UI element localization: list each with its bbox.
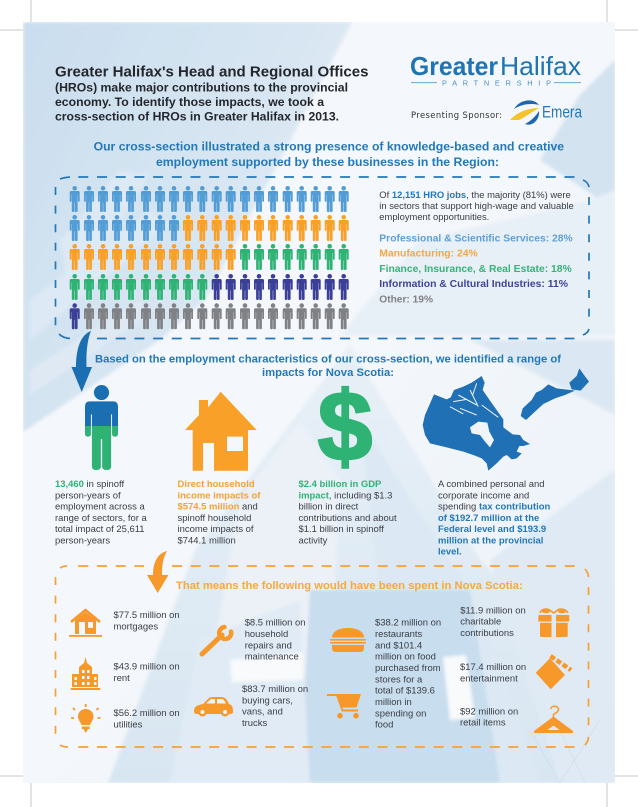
item: retail [460,706,573,733]
icon: car [194,697,233,716]
text: household income: $574.5 million and [178,502,258,512]
item: household repairs: $8.5 million on [245,618,306,629]
text: tax contribution: million at the provincial [438,535,543,546]
item: mortgages [69,610,180,637]
icon: shopping cart [327,694,361,718]
text: HRO jobs intro: employment opportunities. [379,212,489,223]
text: GDP impact: $1.1 billion in spinoff [298,524,384,535]
text: food spending: and $101.4 [375,640,422,651]
legend: sector shares: Information & Cultural Industries: 11% [379,279,568,290]
item: mortgages: mortgages [114,622,158,632]
text: tax contribution [438,479,550,558]
icon: map of Canada [423,376,530,471]
item: utilities: utilities [114,720,143,731]
icon: orange house [185,392,257,471]
heading: cross-section: employment supported by these businesses in the Region: [156,155,499,169]
item: entertainment: entertainment [460,673,518,684]
text: GDP impact: billion in direct [298,502,359,512]
text: food spending: million on food [375,652,436,663]
item: utilities: $56.2 million on [114,708,180,719]
item: rent [71,657,180,690]
legend: sector shares: Manufacturing: 24% [379,249,478,260]
text: spinoff employment: 13,460 in spinoff [55,479,124,490]
text: GDP impact: contributions and about [298,513,397,524]
heading: impacts: impacts for Nova Scotia: [262,367,394,379]
item: utilities [71,704,180,733]
text: tax contribution: level. [438,547,462,558]
text: household income: Direct household [178,479,255,490]
title block: (HROs) make major contributions to the provincial [55,80,348,94]
text: tax contribution: of $192.7 million at the [438,513,539,524]
text: food spending: total of $139.6 [375,686,435,697]
icon: dollar sign: $ [318,371,372,481]
text: GDP impact [298,479,397,546]
title block: economy. To identify those impacts, we took a [55,95,324,109]
presenting sponsor: Emera [411,100,583,125]
text: food spending: purchased from [375,663,441,674]
item: entertainment: $17.4 million on [460,662,526,673]
text: tax contribution: corporate income and [438,490,529,501]
icon: burger [330,628,366,652]
text: spinoff employment: person-years [55,535,110,546]
item: vehicles [194,684,308,729]
text: household income: income impacts of [178,490,261,501]
row 5 [70,303,349,329]
text: spinoff employment: person-years of [55,490,121,501]
icon: light bulb [71,704,100,733]
text: spinoff employment [55,479,148,546]
text: GDP impact: activity [298,535,328,546]
arrow: blue down [72,331,92,392]
heading: impacts [95,354,561,379]
item: charitable contributions [460,605,569,639]
item: entertainment [460,656,571,689]
icon: wrench [202,627,231,654]
presenting sponsor: Emera: Emera [542,104,583,122]
item: mortgages: $77.5 million on [114,610,180,621]
text: GDP impact: $2.4 billion in GDP [298,479,381,490]
icon: Emera swoosh [510,100,539,125]
heading: cross-section: Our cross-section illustrated a strong presence of knowledge-based and creative [94,140,564,154]
text: food spending: spending on [375,708,426,719]
item: household repairs: maintenance [245,652,299,663]
icon: small house [69,610,102,637]
icon: hanger [534,706,573,733]
title block [55,64,368,124]
title block: Greater Halifax's Head and Regional Offices [55,64,368,80]
text: household income: income impacts of [178,524,254,535]
item: rent: $43.9 million on [114,662,180,673]
heading: impacts: Based on the employment characteristics of our cross-section, we identified a range of [95,354,561,366]
Greater Halifax Partnership logo: Halifax [500,51,581,81]
text: food spending: food [375,720,393,731]
item: rent: rent [114,673,130,684]
text: GDP impact: impact, including $1.3 [298,490,392,501]
item: household repairs [202,618,306,663]
item: vehicles: buying cars, [242,695,293,706]
row 4 [70,274,349,300]
heading: spending: That means the following would have been spent in Nova Scotia: [176,580,523,592]
Greater Halifax Partnership logo: Greater [410,51,498,81]
item: vehicles: $83.7 million on [242,684,308,695]
icon: gift box [538,609,569,637]
icon: apartment buildings [71,657,100,690]
heading: cross-section [94,140,564,169]
legend: sector shares [379,234,573,306]
Greater Halifax Partnership logo [410,51,581,88]
text: household income [178,479,261,546]
item: vehicles: vans, and [242,707,283,718]
text: household income: spinoff household [178,513,251,524]
text: food spending: $38.2 million on [375,618,441,629]
text: household income: $744.1 million [178,535,236,546]
legend: sector shares: Professional & Scientific Services: 28% [379,234,573,245]
pictogram: 100 people by sector [70,186,349,329]
arrow: orange down [147,551,168,593]
Greater Halifax Partnership logo: PARTNERSHIP [442,78,551,88]
text: HRO jobs intro: in sectors that support high-wage and valuable [379,201,574,212]
text: HRO jobs intro [379,190,574,223]
text: food spending: million in [375,697,412,708]
item: retail: retail items [460,718,506,729]
panel: employment sectors (blue dashed frame) [56,177,589,338]
text: spinoff employment: range of sectors, for a [55,513,148,524]
text: spinoff employment: total impact of 25,611 [55,524,145,535]
presenting sponsor: Emera: Presenting Sponsor: [411,110,502,120]
row 1 [70,186,349,212]
text: food spending: restaurants [375,629,422,640]
title block: cross-section of HROs in Greater Halifax in 2013. [55,110,339,124]
icon: Nova Scotia map [521,368,589,420]
item: retail: $92 million on [460,706,518,717]
row 2 [70,215,349,241]
icon: clapperboard [536,656,571,689]
item: household repairs: repairs and [245,640,292,652]
text: tax contribution: spending tax contribution [438,502,550,512]
legend: sector shares: Other: 19% [379,295,433,306]
text: food spending: stores for a [375,674,423,685]
item: charitable contributions: charitable [460,617,501,628]
text: spinoff employment: employment across a [55,502,145,512]
item: vehicles: trucks [242,718,267,729]
item: charitable contributions: contributions [460,628,514,639]
text: tax contribution: A combined personal and [438,479,545,490]
text: tax contribution: Federal level and $193.9 [438,524,546,535]
icon: two-colour person [85,385,118,470]
panel: spending (orange dashed frame) [56,566,588,747]
text: HRO jobs intro: Of 12,151 HRO jobs, the majority (81%) were [379,190,571,201]
item: charitable contributions: $11.9 million on [460,605,526,616]
legend: sector shares: Finance, Insurance, & Real Estate: 18% [379,264,572,275]
item: household repairs: household [245,629,288,640]
row 3 [70,244,349,270]
